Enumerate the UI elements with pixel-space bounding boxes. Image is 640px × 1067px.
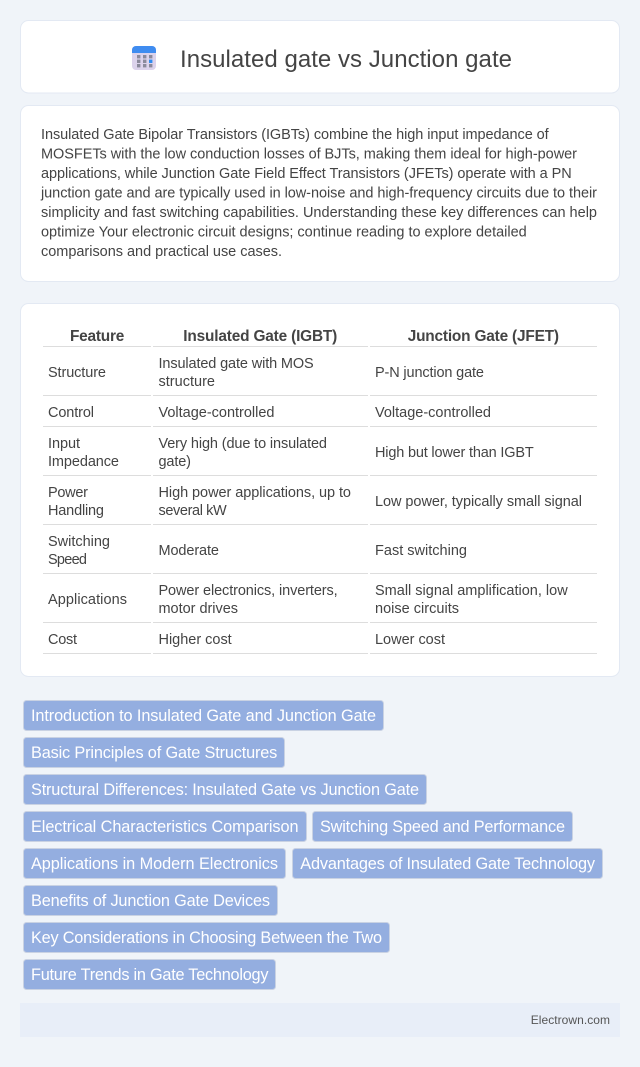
footer: Electrown.com bbox=[531, 1013, 610, 1027]
table row: input impedance: Input bbox=[48, 436, 80, 452]
text block: introduction: MOSFETs with the low conduction losses of BJTs, making them ideal for high-power bbox=[41, 146, 577, 162]
table row: applications bbox=[48, 583, 568, 617]
tag: future trends: Future Trends in Gate Technology bbox=[31, 966, 269, 984]
table row: input impedance: Impedance bbox=[48, 454, 119, 470]
tag: electrical characteristics: Electrical Characteristics Comparison bbox=[31, 818, 298, 836]
panel: header bbox=[20, 20, 620, 93]
table row: structure: Insulated gate with MOS bbox=[158, 356, 314, 372]
icon: calendar bbox=[132, 46, 156, 70]
table row: cost: Lower cost bbox=[375, 632, 445, 648]
table row: switching speed bbox=[48, 534, 467, 568]
table header row bbox=[70, 328, 559, 345]
table row: structure: Structure bbox=[48, 365, 106, 381]
section links bbox=[24, 700, 602, 990]
tag: applications: Applications in Modern Electronics bbox=[31, 855, 278, 873]
table row: power handling: Handling bbox=[48, 503, 104, 519]
table row: applications: motor drives bbox=[158, 601, 238, 617]
tag: introduction: Introduction to Insulated Gate and Junction Gate bbox=[31, 707, 376, 725]
tag: advantages: Advantages of Insulated Gate Technology bbox=[300, 855, 596, 873]
tag: applications bbox=[24, 848, 286, 878]
table row: power handling: several kW bbox=[158, 503, 227, 519]
table row: applications: noise circuits bbox=[375, 601, 459, 617]
tag: advantages bbox=[292, 848, 602, 878]
tag: key considerations: Key Considerations in Choosing Between the Two bbox=[31, 929, 382, 947]
footer bbox=[20, 1003, 620, 1037]
table row: power handling: Low power, typically small signal bbox=[375, 494, 582, 510]
table row: power handling: Power bbox=[48, 485, 88, 501]
table row: switching speed: Speed bbox=[48, 552, 87, 568]
text block: introduction: applications, while Junction Gate Field Effect Transistors (JFETs) operate with a PN bbox=[41, 166, 572, 182]
table row: power handling: High power applications, up to bbox=[158, 485, 351, 501]
table row: input impedance bbox=[48, 436, 534, 470]
tag: structural differences bbox=[24, 774, 426, 804]
tag: basic principles: Basic Principles of Gate Structures bbox=[31, 744, 277, 762]
table row: applications: Applications bbox=[48, 592, 127, 608]
table row: cost: Higher cost bbox=[158, 632, 232, 648]
tag: introduction bbox=[24, 700, 384, 730]
tag: future trends bbox=[24, 960, 276, 990]
table header row: Junction Gate (JFET) bbox=[408, 328, 559, 345]
table row: switching speed: Switching bbox=[48, 534, 110, 550]
text block: introduction: optimize Your electronic circuit designs; continue reading to explore detailed bbox=[41, 224, 527, 240]
table row: structure: structure bbox=[158, 374, 215, 390]
table row: cost bbox=[48, 632, 445, 648]
table row: applications: Small signal amplification, low bbox=[375, 583, 568, 599]
tag: benefits: Benefits of Junction Gate Devices bbox=[31, 892, 270, 910]
table row: input impedance: gate) bbox=[158, 454, 191, 470]
table row: cost: Cost bbox=[48, 632, 77, 648]
title: Insulated gate vs Junction gate bbox=[180, 46, 512, 73]
table row: switching speed: Fast switching bbox=[375, 543, 467, 559]
tag: electrical characteristics bbox=[24, 812, 306, 842]
table row: control bbox=[48, 405, 491, 421]
tag: benefits bbox=[24, 886, 278, 916]
table row: applications: Power electronics, inverters, bbox=[158, 583, 338, 599]
text block: introduction: comparisons and practical use cases. bbox=[41, 244, 282, 260]
tag: key considerations bbox=[24, 922, 390, 952]
table row: control: Voltage-controlled bbox=[375, 405, 491, 421]
table header row: Insulated Gate (IGBT) bbox=[183, 328, 337, 345]
tag: switching speed: Switching Speed and Performance bbox=[320, 818, 565, 836]
table row: structure: P-N junction gate bbox=[375, 365, 484, 381]
text block: introduction: junction gate and are typically used in low-noise and high-frequency circuits due to their bbox=[40, 186, 597, 202]
text block: introduction bbox=[40, 127, 597, 260]
panel: comparison table bbox=[20, 304, 620, 676]
text block: introduction: simplicity and fast switching capabilities. Understanding these key differences can help bbox=[41, 205, 597, 221]
table row: control: Control bbox=[48, 405, 94, 421]
table row: input impedance: Very high (due to insulated bbox=[158, 436, 327, 452]
tag: switching speed bbox=[312, 812, 572, 842]
table header row: Feature bbox=[70, 328, 125, 345]
table row: switching speed: Moderate bbox=[158, 543, 219, 559]
table row: control: Voltage-controlled bbox=[158, 405, 274, 421]
table row: power handling bbox=[48, 485, 582, 519]
text block: introduction: Insulated Gate Bipolar Transistors (IGBTs) combine the high input impedance of bbox=[41, 127, 550, 143]
table row: structure bbox=[48, 356, 484, 390]
table row: input impedance: High but lower than IGBT bbox=[375, 445, 534, 461]
tag: basic principles bbox=[24, 738, 284, 768]
tag: structural differences: Structural Differences: Insulated Gate vs Junction Gate bbox=[31, 781, 419, 799]
panel: introduction paragraph bbox=[20, 106, 620, 282]
